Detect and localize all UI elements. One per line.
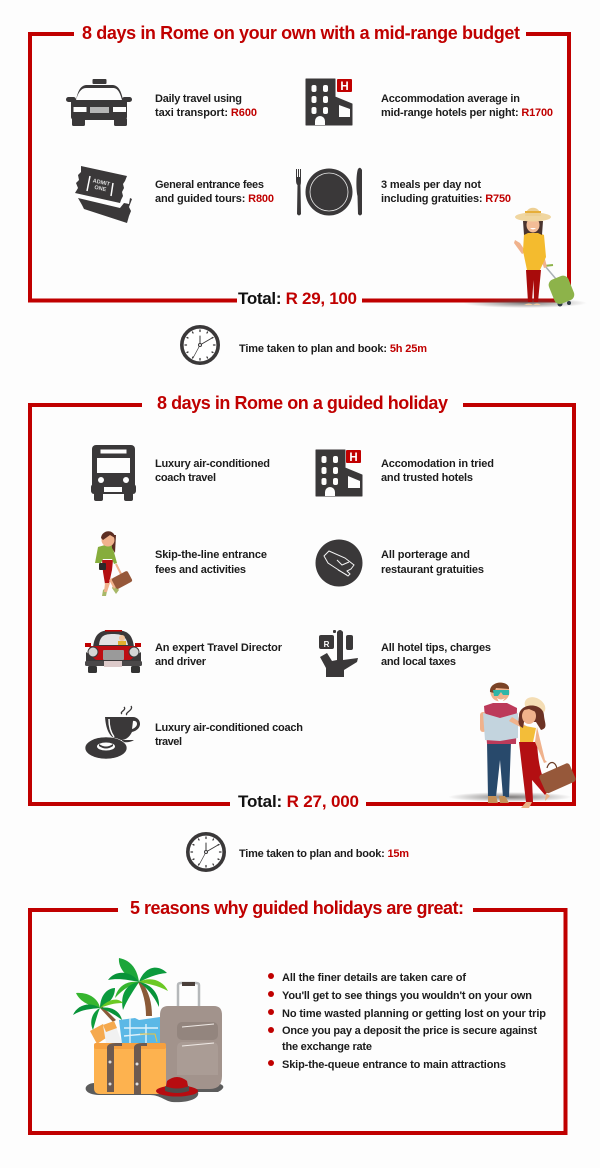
text: coach travel: Luxury air-conditioned bbox=[155, 458, 270, 470]
text: taxi transport: Daily travel using bbox=[155, 93, 242, 105]
list: reasons: You'll get to see things you wouldn't on your own bbox=[282, 990, 532, 1002]
icon: taxi bbox=[66, 79, 132, 126]
icon: hotel: H bbox=[340, 81, 349, 93]
text: accommodation bbox=[381, 93, 553, 119]
icon: hand with tips bbox=[319, 630, 358, 677]
text: tips and taxes bbox=[381, 642, 491, 668]
list: reasons: Once you pay a deposit the price is secure against bbox=[282, 1025, 537, 1037]
icon: admit one tickets bbox=[75, 166, 132, 223]
panel: guided holiday bbox=[30, 393, 577, 870]
icon: hand with tips: R bbox=[324, 640, 330, 649]
icon: coffee and donut bbox=[85, 706, 140, 759]
text: entrance fees: General entrance fees bbox=[155, 179, 264, 191]
total: guided: Total: R 27, 000 bbox=[238, 792, 359, 811]
text: gratuities bbox=[381, 549, 484, 576]
text: entrance fees: and guided tours: R800 bbox=[155, 193, 274, 205]
text: accommodation: Accomodation in tried bbox=[381, 458, 494, 470]
text: coach travel second: Luxury air-conditioned coach bbox=[155, 722, 303, 734]
panel frame: reasons bbox=[30, 910, 566, 1133]
text: skip the line: Skip-the-line entrance bbox=[155, 549, 267, 561]
heading: own trip: 8 days in Rome on your own with a mid-range budget bbox=[82, 23, 520, 43]
icon: admit one tickets: ONE bbox=[94, 185, 107, 193]
illustration: luggage and palm trees bbox=[73, 958, 223, 1102]
icon: hotel bbox=[316, 450, 362, 496]
text: travel director: An expert Travel Director bbox=[155, 642, 283, 654]
panel frame: guided bbox=[30, 405, 576, 804]
icon: hotel: H bbox=[349, 452, 358, 464]
icon: clock bbox=[188, 834, 224, 870]
panel: self-planned trip bbox=[30, 23, 587, 363]
text: coach travel second bbox=[155, 722, 303, 748]
text: accommodation bbox=[381, 458, 494, 484]
list: reasons: No time wasted planning or getting lost on your trip bbox=[282, 1008, 546, 1020]
text: tips and taxes: and local taxes bbox=[381, 656, 456, 668]
icon: clock bbox=[182, 327, 218, 363]
text: tips and taxes: All hotel tips, charges bbox=[381, 642, 491, 654]
text: taxi transport: taxi transport: R600 bbox=[155, 107, 257, 119]
total: self-planned: Total: R 29, 100 bbox=[238, 289, 357, 308]
text: skip the line: fees and activities bbox=[155, 564, 246, 576]
illustration: woman with handbag bbox=[95, 531, 133, 596]
list: reasons: All the finer details are taken care of bbox=[282, 972, 466, 984]
text: coach travel bbox=[155, 458, 270, 484]
list: reasons: the exchange rate bbox=[282, 1041, 372, 1053]
panel: five reasons bbox=[30, 898, 566, 1133]
illustration: couple with map bbox=[448, 682, 577, 808]
list: reasons: Skip-the-queue entrance to main attractions bbox=[282, 1059, 506, 1071]
list: reasons bbox=[268, 972, 546, 1071]
text: meals: 3 meals per day not bbox=[381, 179, 481, 191]
text: coach travel second: travel bbox=[155, 736, 182, 748]
text: travel director bbox=[155, 642, 283, 668]
icon: coach bbox=[91, 445, 136, 501]
icon: handshake gratuity bbox=[316, 540, 362, 586]
text: meals bbox=[381, 179, 511, 205]
icon: plate and cutlery bbox=[296, 168, 362, 216]
icon: hotel bbox=[306, 79, 352, 125]
text: entrance fees bbox=[155, 179, 274, 205]
icon: red car with driver bbox=[85, 630, 142, 673]
text: meals: including gratuities: R750 bbox=[381, 193, 511, 205]
panel frame: self-planned bbox=[30, 34, 569, 300]
text: accommodation: Accommodation average in bbox=[381, 93, 520, 105]
text: coach travel: coach travel bbox=[155, 472, 216, 484]
text: gratuities: All porterage and bbox=[381, 549, 470, 561]
icon: admit one tickets: ADMIT bbox=[92, 178, 111, 188]
text: planning time: Time taken to plan and book: 5h 25m bbox=[239, 343, 427, 355]
text: gratuities: restaurant gratuities bbox=[381, 564, 484, 576]
text: accommodation: mid-range hotels per night: R1700 bbox=[381, 107, 553, 119]
heading: reasons: 5 reasons why guided holidays are great: bbox=[130, 898, 464, 918]
text: accommodation: and trusted hotels bbox=[381, 472, 473, 484]
illustration: woman with suitcase bbox=[463, 208, 587, 308]
text: skip the line bbox=[155, 549, 267, 576]
text: travel director: and driver bbox=[155, 656, 207, 668]
text: taxi transport bbox=[155, 93, 257, 119]
heading: guided holiday: 8 days in Rome on a guided holiday bbox=[157, 393, 448, 413]
text: planning time: Time taken to plan and book: 15m bbox=[239, 848, 409, 860]
